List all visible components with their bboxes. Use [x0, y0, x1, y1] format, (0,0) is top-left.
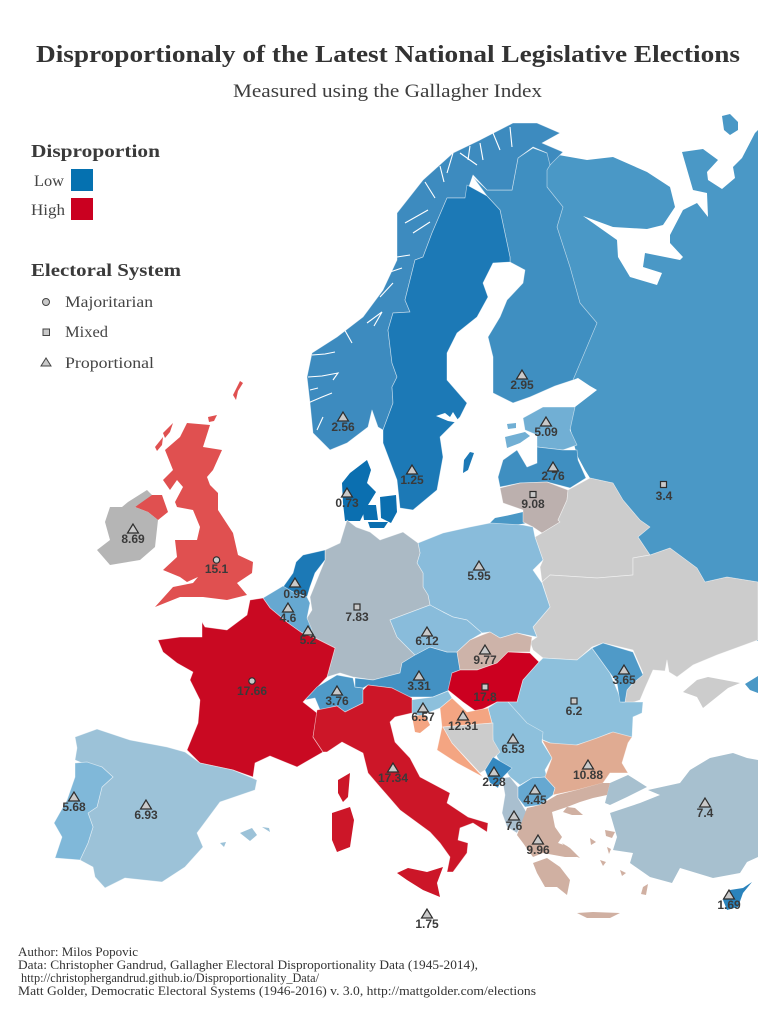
label: Montenegro [482, 767, 506, 789]
label: Norway [331, 412, 355, 434]
label: Portugal [62, 792, 86, 814]
legend icon: proportional [41, 358, 51, 366]
legend: disproportion [31, 141, 160, 220]
credits: Matt Golder, Democratic Electoral Systems (1946-2016) v. 3.0, http://mattgolder.com/elections [18, 984, 536, 998]
swatch: high [71, 198, 93, 220]
country: Italy [313, 685, 488, 872]
region: Istria [412, 715, 430, 733]
island: Gotland [463, 452, 474, 473]
label: Austria: 3.31 [407, 679, 431, 693]
map of Europe [54, 114, 758, 918]
credits [18, 945, 536, 998]
label: Montenegro: 2.28 [482, 775, 506, 789]
country: Finland [473, 148, 597, 403]
label: Belgium [280, 603, 297, 625]
label: Italy [378, 763, 408, 785]
label: Ireland: 8.69 [121, 532, 145, 546]
country: Montenegro [485, 757, 512, 788]
label: Sweden: 1.25 [400, 473, 424, 487]
label: Hungary [473, 684, 497, 704]
legend label: proportional: Proportional [65, 355, 155, 372]
title: Disproportionaly of the Latest National Legislative Elections [36, 42, 740, 68]
country: Russia [488, 114, 758, 693]
country: Bosnia [443, 723, 500, 773]
country: Sweden [383, 185, 510, 510]
country: Serbia [488, 702, 552, 785]
label: Switzerland: 3.76 [325, 694, 349, 708]
subtitle: Measured using the Gallagher Index [233, 81, 543, 102]
country: Belarus [535, 478, 650, 582]
label: Spain: 6.93 [134, 808, 158, 822]
label: Ireland [121, 524, 145, 546]
label: Netherlands [283, 578, 307, 601]
region: Crimea [683, 677, 740, 708]
country: Netherlands [283, 550, 325, 597]
country: Turkey [605, 753, 758, 883]
label: Germany: 7.83 [345, 610, 369, 624]
legend: electoral system [31, 260, 181, 372]
country: Estonia [505, 407, 577, 450]
label: Spain [134, 800, 158, 822]
label: Latvia [541, 462, 565, 483]
country: Lithuania [500, 482, 568, 533]
country: Slovakia [457, 632, 532, 670]
label: Sweden [400, 465, 424, 487]
island: Sicily [397, 867, 443, 897]
country: Ireland [97, 490, 158, 565]
country: Hungary [448, 652, 539, 712]
label: Germany [345, 604, 369, 624]
label: Estonia [534, 417, 558, 439]
label: Denmark: 0.73 [335, 496, 359, 510]
label: France [237, 678, 267, 698]
label: Moldova [612, 665, 636, 687]
label: Norway: 2.56 [331, 420, 355, 434]
country: Germany [307, 520, 430, 680]
country: France [158, 598, 335, 777]
label: Albania: 7.6 [506, 819, 523, 833]
label: Greece: 9.96 [526, 843, 550, 857]
label: Finland [510, 370, 534, 392]
label: Hungary: 17.8 [473, 690, 497, 704]
label: Czech Republic [415, 627, 439, 648]
label: Lithuania: 9.08 [521, 497, 545, 511]
legend icon: mixed [43, 329, 50, 336]
label: Cyprus: 1.69 [717, 898, 741, 912]
label: Cyprus [717, 890, 741, 912]
credits: http://christophergandrud.github.io/Disproportionality_Data/ [21, 971, 320, 985]
label: Finland: 2.95 [510, 378, 534, 392]
legend label: high: High [31, 202, 65, 219]
label: Russia [656, 482, 673, 503]
island: Sardinia [332, 807, 354, 852]
label: Poland: 5.95 [467, 569, 491, 583]
label: Malta [415, 909, 439, 931]
legend label: majoritarian: Majoritarian [65, 294, 153, 311]
label: Greece [526, 835, 550, 857]
swatch: low [71, 169, 93, 191]
label: Netherlands: 0.99 [283, 587, 307, 601]
label: Albania [506, 811, 523, 833]
label: Croatia [448, 711, 478, 733]
credits: Author: Milos Popovic [18, 945, 138, 959]
label: Macedonia: 4.45 [523, 793, 547, 807]
country: Switzerland [305, 675, 363, 712]
label: Serbia [501, 734, 525, 756]
country: Belgium [263, 586, 312, 633]
label: Serbia: 6.53 [501, 742, 525, 756]
country: Ukraine [530, 548, 758, 704]
country: Denmark [342, 460, 397, 528]
label: Slovakia: 9.77 [473, 653, 497, 667]
label: Moldova: 3.65 [612, 673, 636, 687]
credits: Data: Christopher Gandrud, Gallagher Electoral Disproportionality Data (1945-2014), [18, 958, 478, 972]
country: Portugal [54, 762, 113, 860]
country: Norway [307, 123, 563, 450]
fjords of Norway [308, 127, 512, 430]
label: Bulgaria [573, 760, 603, 782]
legend heading: disproportion: Disproportion [31, 141, 160, 161]
label: Poland [467, 561, 491, 583]
legend label: low: Low [34, 173, 64, 190]
label: Bulgaria: 10.88 [573, 768, 603, 782]
Balearic islands [220, 827, 270, 847]
label: Croatia: 12.31 [448, 719, 478, 733]
label: Switzerland [325, 686, 349, 708]
legend label: mixed: Mixed [65, 324, 108, 341]
country: Latvia [498, 447, 586, 488]
label: Romania [566, 698, 583, 718]
label: Latvia: 2.76 [541, 469, 565, 483]
label: Slovakia [473, 645, 497, 667]
label: Turkey [697, 798, 714, 820]
label: Portugal: 5.68 [62, 800, 86, 814]
label: Slovenia [411, 703, 435, 724]
label: Turkey: 7.4 [697, 806, 714, 820]
country: Croatia [437, 698, 492, 777]
legend heading: electoral system: Electoral System [31, 260, 181, 280]
label: France: 17.66 [237, 684, 267, 698]
country: Macedonia [518, 777, 555, 807]
label: Estonia: 5.09 [534, 425, 558, 439]
island: Corsica [338, 773, 350, 802]
label: Russia: 3.4 [656, 489, 673, 503]
country: Spain [75, 729, 257, 888]
label: Austria [407, 671, 431, 693]
label: Malta: 1.75 [415, 917, 439, 931]
data labels [62, 370, 741, 931]
country: Greece [517, 783, 648, 918]
label: Slovenia: 6.57 [411, 710, 435, 724]
label: Macedonia [523, 785, 547, 807]
country: Moldova [592, 643, 643, 702]
label: Luxembourg: 5.2 [300, 633, 317, 647]
label: Romania: 6.2 [566, 704, 583, 718]
label: Belgium: 4.6 [280, 611, 297, 625]
label: Denmark [335, 488, 359, 510]
country: Romania [508, 648, 643, 747]
country: Poland [417, 523, 550, 638]
label: Italy: 17.34 [378, 771, 408, 785]
label: Luxembourg [300, 626, 317, 647]
country: Cyprus [723, 882, 752, 910]
country: Bulgaria [542, 732, 632, 795]
country: Slovenia [410, 691, 452, 716]
legend icon: majoritarian [42, 298, 50, 306]
country: Austria [355, 647, 460, 697]
label: United Kingdom: 15.1 [205, 562, 229, 576]
label: Czech Republic: 6.12 [415, 634, 439, 648]
lake in Sweden [436, 412, 464, 423]
country: Albania [502, 777, 527, 833]
country: Czech Republic [390, 605, 482, 655]
country: United Kingdom [135, 381, 253, 607]
